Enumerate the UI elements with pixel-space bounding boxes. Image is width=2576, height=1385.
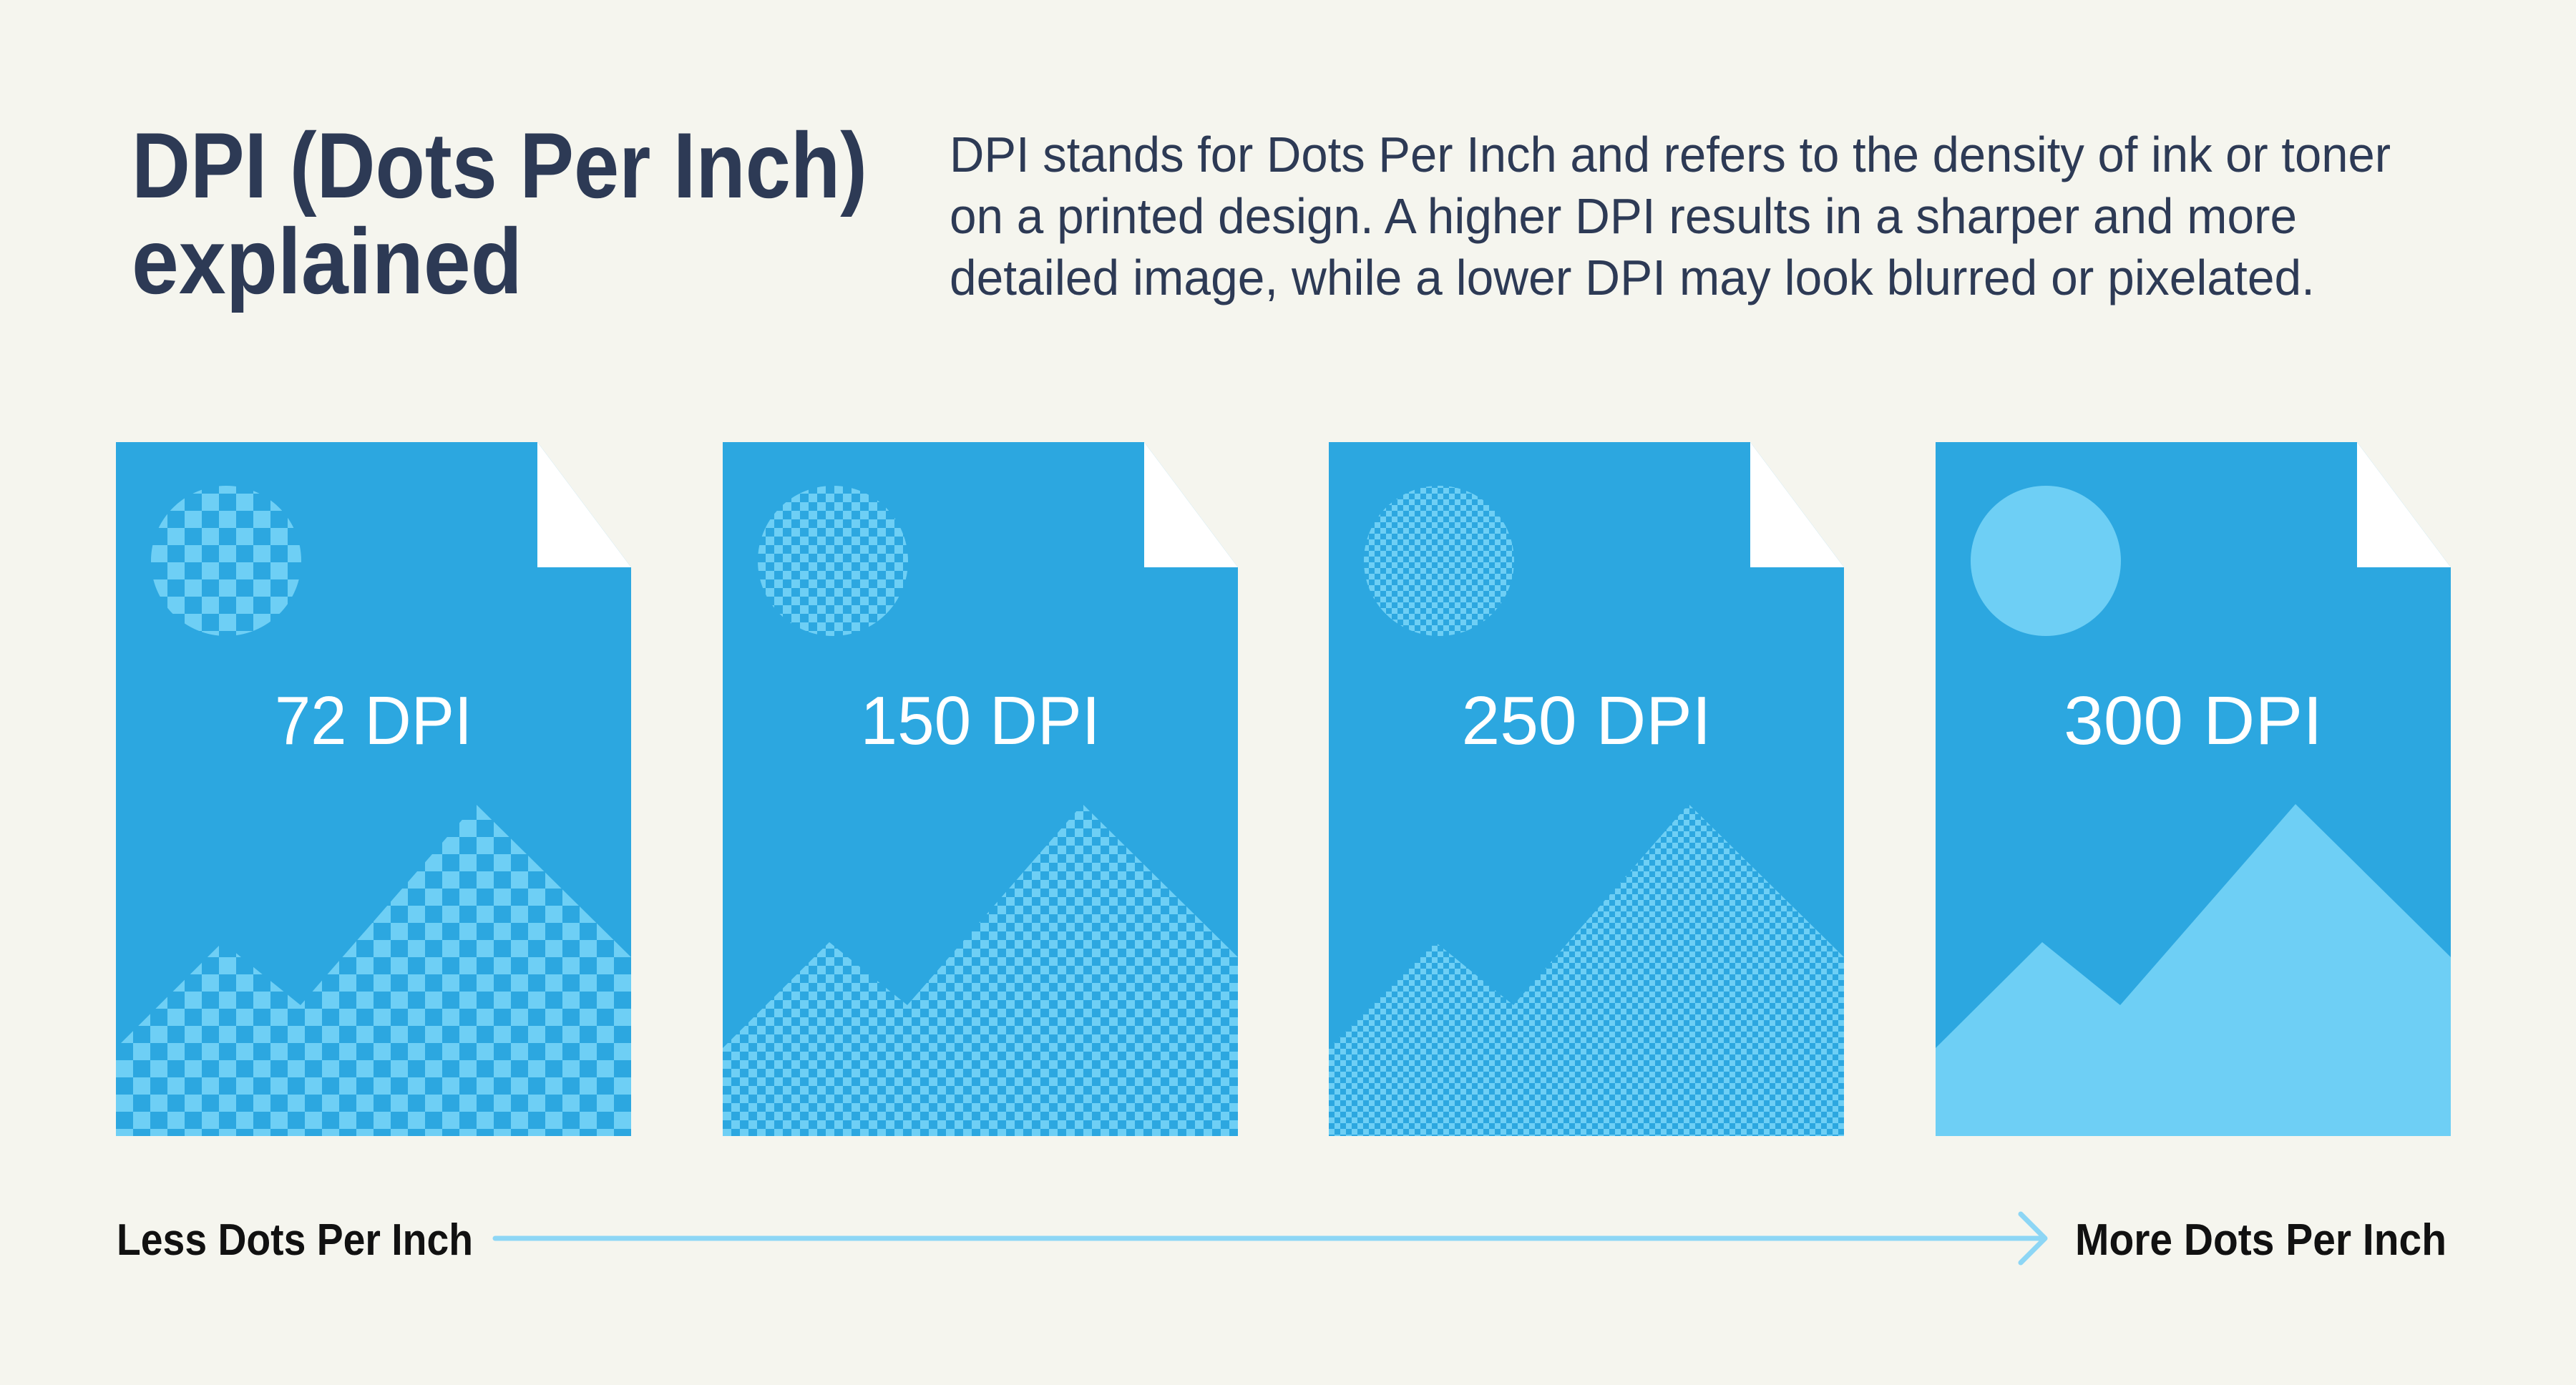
pixelated mountains (116, 804, 631, 1136)
pixelated mountains (1329, 804, 1844, 1136)
card: 300 DPI (1936, 442, 2451, 1136)
description text: on a printed design. A higher DPI results in a sharper and more (950, 188, 2297, 244)
label: 150 DPI (860, 682, 1101, 759)
label: 250 DPI (1461, 682, 1712, 759)
icon: solid sun (1971, 486, 2121, 636)
solid mountains (1936, 804, 2451, 1136)
description text (950, 127, 2391, 305)
icon: pixelated sun (1364, 486, 1514, 636)
arrow (495, 1214, 2045, 1263)
card: 250 DPI (1329, 442, 1844, 1136)
title: DPI (Dots Per Inch) (132, 113, 867, 217)
card: 72 DPI (116, 442, 631, 1136)
description text: DPI stands for Dots Per Inch and refers to the density of ink or toner (950, 127, 2391, 182)
label: 300 DPI (2064, 682, 2323, 759)
card: 150 DPI (723, 442, 1238, 1136)
label: 72 DPI (275, 682, 472, 759)
title (132, 113, 867, 313)
title: explained (132, 209, 522, 313)
label: less dots: Less Dots Per Inch (117, 1215, 473, 1265)
label: more dots: More Dots Per Inch (2075, 1215, 2446, 1265)
icon: pixelated sun (151, 486, 301, 636)
pixelated mountains (723, 804, 1238, 1136)
icon: pixelated sun (758, 486, 908, 636)
description text: detailed image, while a lower DPI may look blurred or pixelated. (950, 250, 2315, 305)
